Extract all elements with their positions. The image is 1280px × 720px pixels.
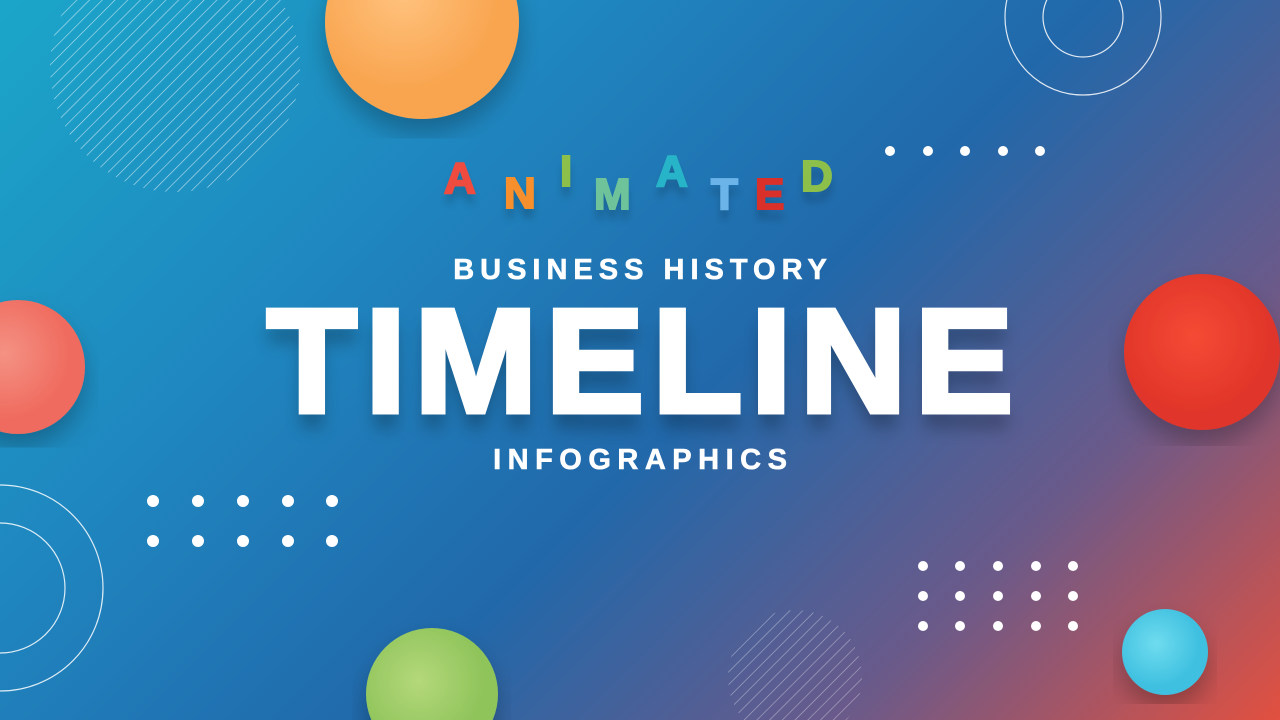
animated letters: M — [594, 170, 631, 219]
hatched circle top-left — [50, 0, 300, 192]
animated letters: A — [656, 147, 688, 196]
animated letters: E — [755, 170, 784, 219]
title: timeline: TIMELINE — [267, 279, 1021, 444]
animated letters: I — [560, 147, 572, 196]
balls — [325, 0, 519, 119]
animated letters: N — [504, 169, 536, 218]
animated letters — [444, 147, 834, 222]
dots — [147, 146, 1078, 631]
subtitle: business history: BUSINESS HISTORY — [453, 254, 833, 286]
rings top right — [1005, 0, 1161, 95]
animated letters: A — [444, 154, 476, 203]
hatched circle bottom — [728, 610, 862, 720]
rings left — [0, 485, 103, 691]
subtitle: infographics: INFOGRAPHICS — [493, 444, 793, 476]
animated letters: D — [801, 152, 833, 201]
animated letters: T — [711, 170, 738, 219]
